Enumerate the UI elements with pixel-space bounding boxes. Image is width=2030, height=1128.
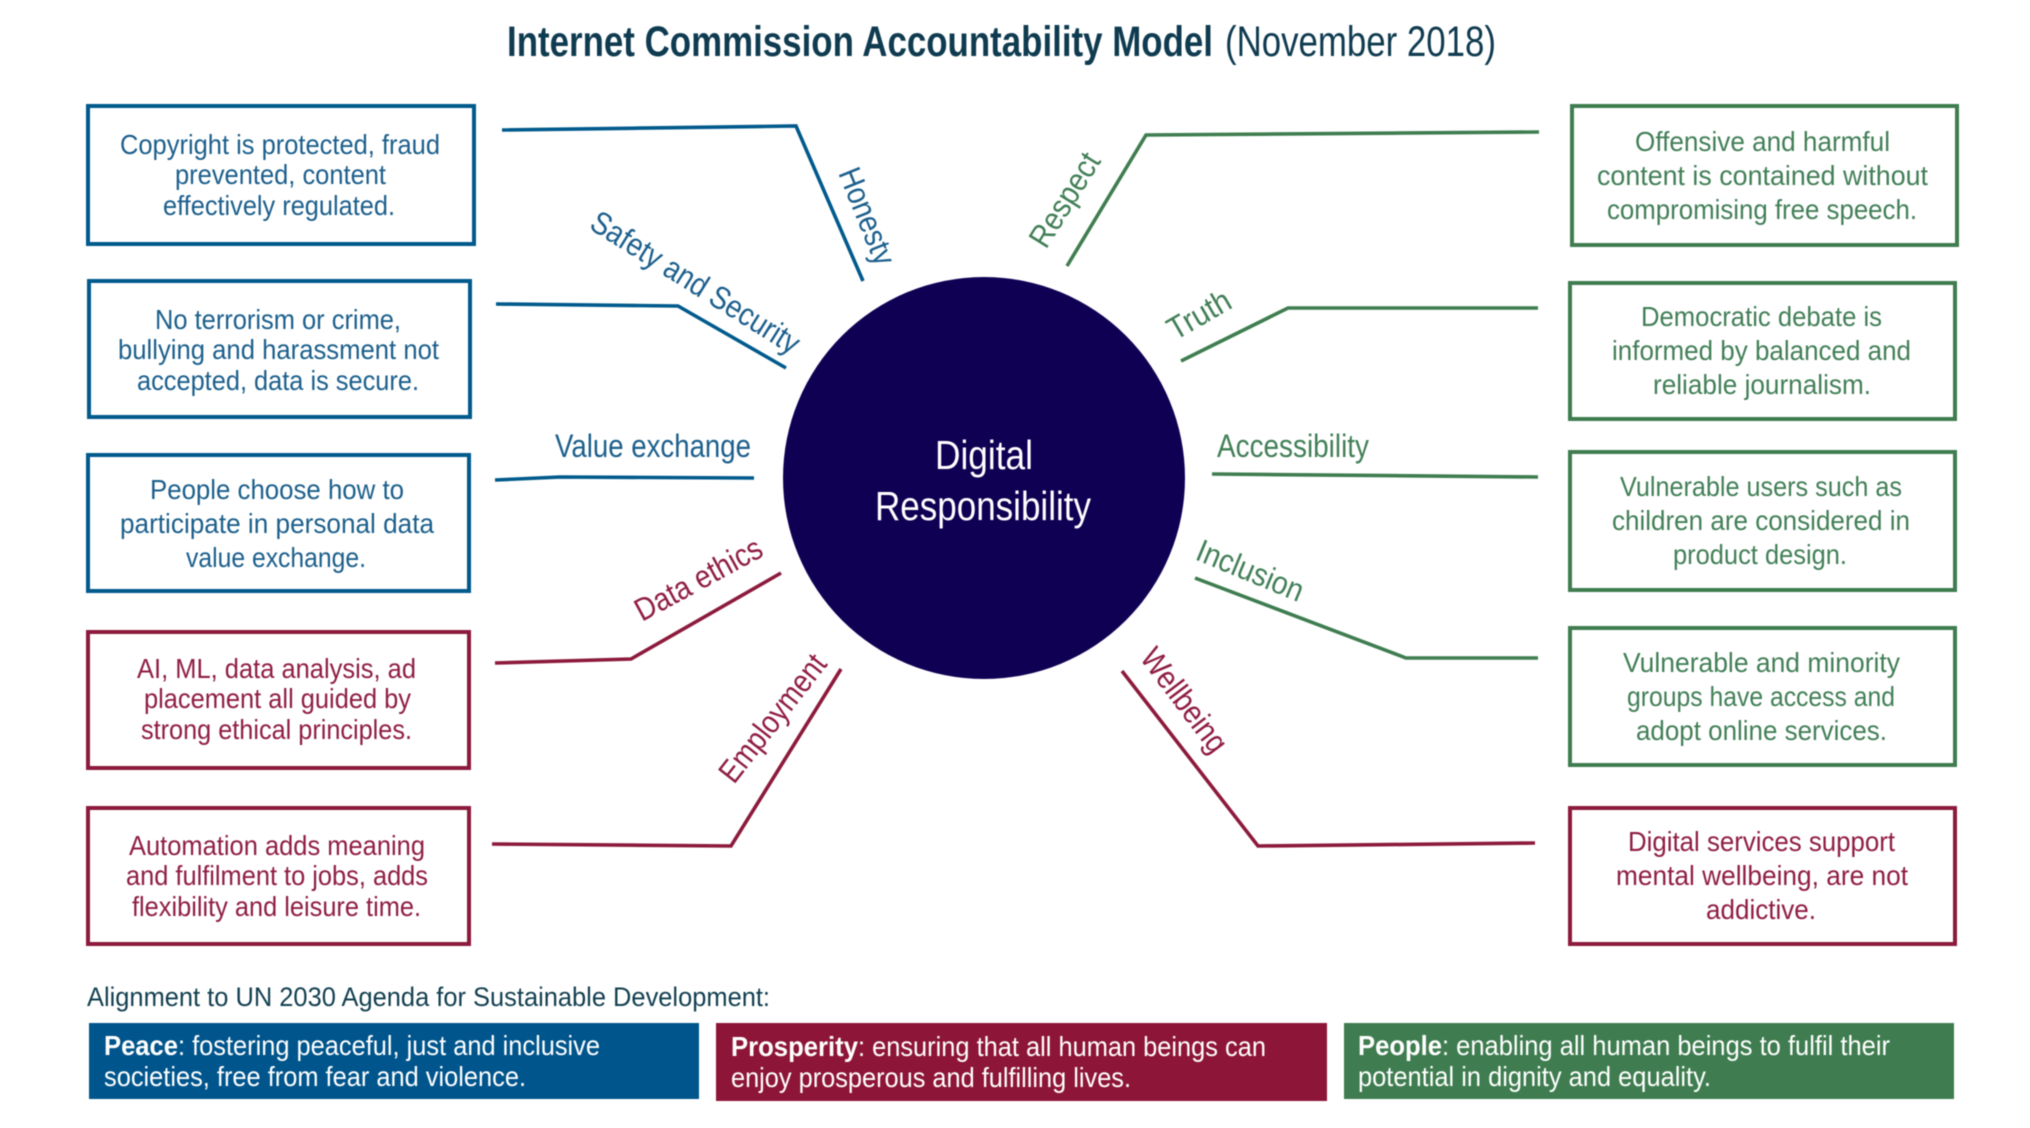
banner: Prosperity <box>716 1023 1327 1101</box>
panel: safety and security: No terrorism or crime, <box>155 304 401 335</box>
panel: respect: compromising free speech. <box>1607 194 1917 225</box>
panel: wellbeing: addictive. <box>1706 894 1816 925</box>
panel: inclusion: groups have access and <box>1627 681 1895 712</box>
panel: wellbeing: Digital services support <box>1628 826 1895 857</box>
central circle: Digital Responsibility: Digital <box>935 432 1033 478</box>
panel: inclusion <box>1570 628 1955 765</box>
panel: accessibility: children are considered in <box>1612 505 1910 536</box>
panel: data ethics: strong ethical principles. <box>141 714 412 745</box>
panel: safety and security: accepted, data is secure. <box>137 365 419 396</box>
connector: Safety and Security: Safety and Security <box>584 203 807 361</box>
panel: employment: Automation adds meaning <box>129 830 425 861</box>
panel: honesty: prevented, content <box>175 159 386 190</box>
panel: safety and security: bullying and harassment not <box>118 334 439 365</box>
panel: employment: flexibility and leisure time. <box>132 891 421 922</box>
panel: accessibility <box>1570 452 1955 590</box>
banner: People <box>1344 1023 1954 1099</box>
panel: employment <box>88 808 469 944</box>
banner: People: potential in dignity and equality. <box>1358 1061 1711 1092</box>
panel: accessibility: product design. <box>1673 539 1847 570</box>
connector: Inclusion <box>1191 532 1538 658</box>
panel: truth <box>1570 283 1955 419</box>
panel: honesty: effectively regulated. <box>163 190 395 221</box>
banner: Prosperity: : ensuring that all human beings can <box>858 1031 1266 1062</box>
connector: Data ethics: Data ethics <box>628 530 768 628</box>
connector: Honesty: Honesty <box>832 162 903 270</box>
panel: wellbeing: mental wellbeing, are not <box>1616 860 1908 891</box>
banner: People: People <box>1358 1030 1442 1061</box>
alignment heading: Alignment to UN 2030 Agenda for Sustainable Development: <box>87 982 770 1012</box>
panel: data ethics: placement all guided by <box>144 683 411 714</box>
connector: Value exchange: Value exchange <box>555 428 751 464</box>
panel: data ethics: AI, ML, data analysis, ad <box>137 653 416 684</box>
panel: employment: and fulfilment to jobs, adds <box>126 860 428 891</box>
connector: Employment: Employment <box>711 647 834 789</box>
panel: value exchange: value exchange. <box>186 542 366 573</box>
banner: Peace: Peace <box>104 1030 178 1061</box>
connector: Wellbeing <box>1122 641 1535 846</box>
connector: Inclusion: Inclusion <box>1191 532 1309 609</box>
connector: Truth <box>1160 282 1538 361</box>
connector: Honesty <box>502 126 903 281</box>
banner: People: : enabling all human beings to fulfil their <box>1442 1030 1890 1061</box>
panel: accessibility: Vulnerable users such as <box>1620 471 1902 502</box>
connector: Safety and Security <box>496 203 807 368</box>
connector: Wellbeing: Wellbeing <box>1133 641 1236 760</box>
panel: honesty: Copyright is protected, fraud <box>120 129 440 160</box>
connector: Respect: Respect <box>1021 146 1108 254</box>
connector: Accessibility <box>1212 428 1538 477</box>
panel: value exchange: participate in personal data <box>120 508 435 539</box>
connector: Accessibility: Accessibility <box>1217 428 1369 464</box>
panel: inclusion: Vulnerable and minority <box>1623 647 1900 678</box>
connector: Employment <box>492 647 841 846</box>
central circle: Digital Responsibility: Responsibility <box>875 483 1091 529</box>
panel: data ethics <box>88 632 469 768</box>
banner: Peace <box>89 1023 699 1099</box>
central circle: Digital Responsibility <box>783 277 1185 679</box>
panel: inclusion: adopt online services. <box>1636 715 1887 746</box>
panel: respect: content is contained without <box>1597 160 1928 191</box>
panel: respect <box>1572 106 1957 245</box>
title: Internet Commission Accountability Model <box>507 18 1213 66</box>
panel: truth: reliable journalism. <box>1653 369 1871 400</box>
title: (November 2018) <box>1225 18 1496 66</box>
connector: Value exchange <box>495 428 754 480</box>
panel: safety and security <box>89 281 470 417</box>
panel: honesty <box>88 106 474 244</box>
panel: wellbeing <box>1570 808 1955 944</box>
banner: Peace: : fostering peaceful, just and inclusive <box>178 1030 600 1061</box>
banner: Prosperity: enjoy prosperous and fulfilling lives. <box>731 1062 1131 1093</box>
panel: value exchange <box>88 455 469 591</box>
panel: respect: Offensive and harmful <box>1635 126 1890 157</box>
connector: Respect <box>1021 132 1539 266</box>
banner: Peace: societies, free from fear and violence. <box>104 1061 526 1092</box>
panel: value exchange: People choose how to <box>150 474 404 505</box>
panel: truth: Democratic debate is <box>1641 301 1882 332</box>
connector: Data ethics <box>495 530 781 663</box>
connector: Truth: Truth <box>1160 282 1237 347</box>
panel: truth: informed by balanced and <box>1612 335 1911 366</box>
banner: Prosperity: Prosperity <box>731 1031 859 1062</box>
